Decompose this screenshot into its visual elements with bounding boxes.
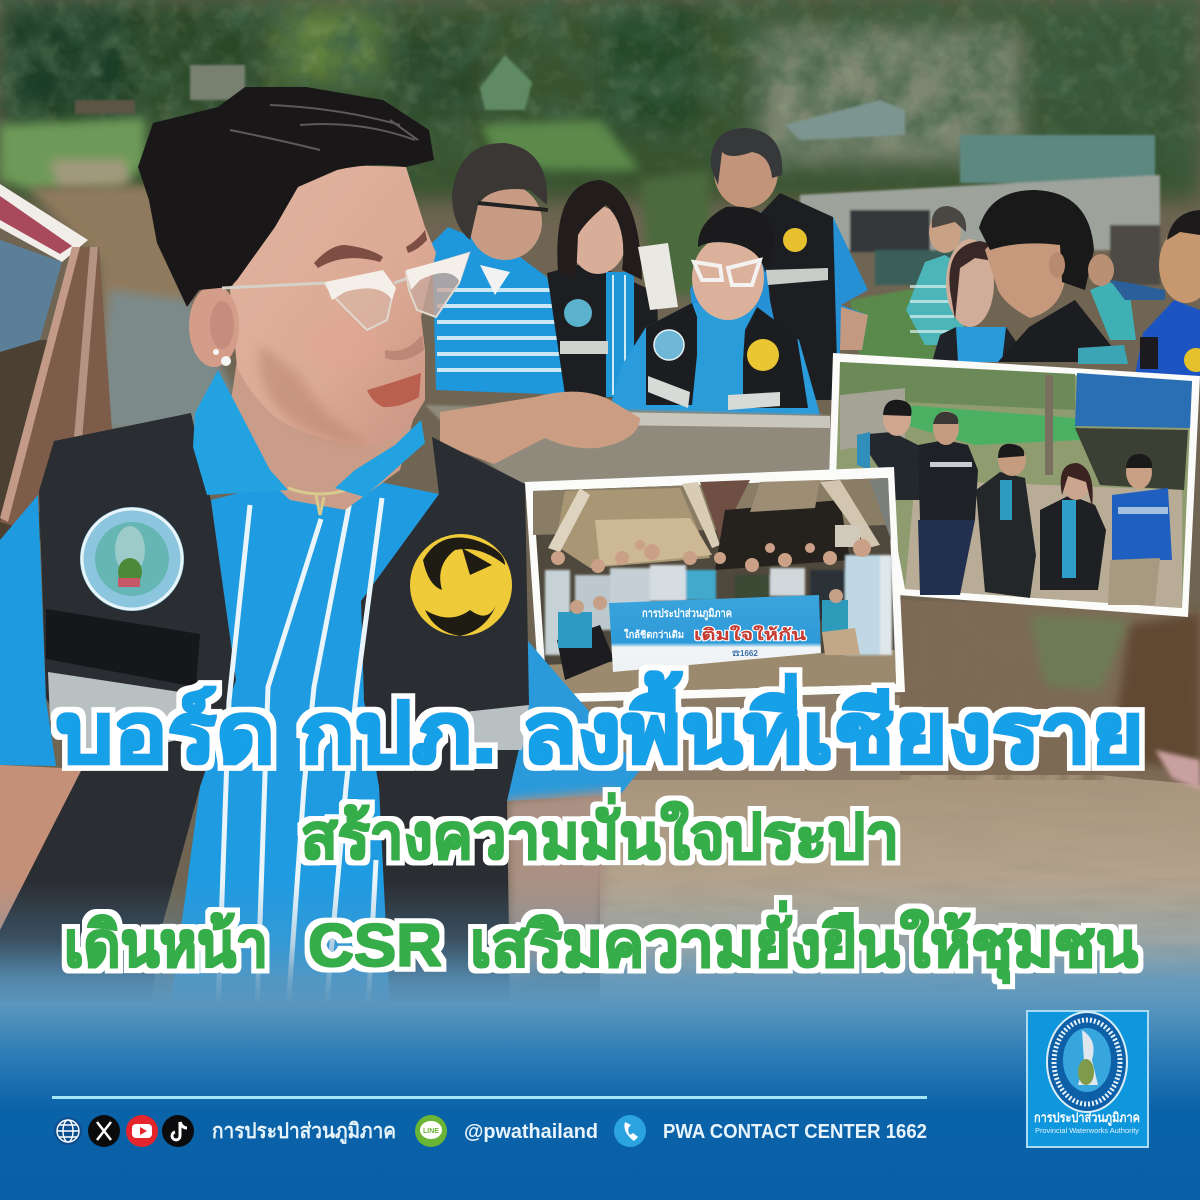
LINE handle: @pwathailand	[464, 1121, 598, 1143]
person 4	[1040, 463, 1106, 590]
official: man with short hair	[979, 190, 1128, 364]
shirt stripes	[218, 498, 382, 1010]
official: main woman in vest	[612, 207, 820, 415]
icon: X	[88, 1115, 120, 1147]
background group of officials, centre	[425, 128, 868, 520]
official: man in striped polo	[906, 206, 966, 345]
official: tall man behind	[690, 128, 868, 400]
photo scene	[836, 362, 1192, 608]
river and bank right	[600, 770, 1200, 1030]
reflective band right	[464, 705, 529, 750]
person 1	[857, 400, 922, 500]
logo seal	[1047, 1012, 1127, 1112]
banner: การประปาส่วนภูมิภาค	[642, 607, 732, 621]
headline line 3: เดินหน้า	[64, 911, 268, 980]
icon: globe	[54, 1117, 82, 1145]
organisation name: การประปาส่วนภูมิภาค	[212, 1120, 396, 1145]
yellow emblem on vest	[410, 534, 512, 636]
foliage texture	[0, 0, 1200, 166]
background group of officials, right	[906, 190, 1200, 380]
official: man in striped shirt	[432, 143, 570, 395]
hillside houses	[75, 55, 1160, 360]
main subject: woman in glasses and black PWA vest	[0, 87, 640, 1010]
eroded bank	[895, 600, 1200, 785]
footer contact row	[54, 1115, 927, 1147]
official: man at right in teal polo	[1088, 254, 1136, 340]
black vest	[0, 413, 529, 1010]
lips	[367, 373, 421, 407]
grassy riverbank	[0, 118, 710, 300]
contact centre: PWA CONTACT CENTER 1662	[663, 1121, 927, 1143]
icon: TikTok	[162, 1115, 194, 1147]
white photo frame	[829, 353, 1200, 617]
eyebrow	[314, 230, 427, 268]
official: woman in black vest	[547, 180, 660, 400]
left house with red roof	[0, 184, 88, 352]
photo: officials holding water glasses	[829, 353, 1200, 617]
icon: YouTube	[126, 1115, 158, 1147]
photo: group with banner	[525, 467, 905, 703]
headline line 3: เสริมความยั่งยืนให้ชุมชน	[470, 901, 1138, 983]
person 3	[976, 444, 1036, 598]
forest backdrop	[0, 0, 1200, 200]
rusty bridge	[0, 247, 112, 530]
ground	[905, 480, 1182, 608]
official: woman with glasses	[932, 239, 1030, 362]
necklace	[288, 488, 352, 515]
ground	[543, 650, 896, 694]
seated people	[557, 589, 860, 680]
short spiky black hair	[138, 87, 434, 307]
headline line 3	[64, 901, 1138, 983]
banner	[609, 595, 821, 672]
icon: phone	[614, 1115, 646, 1147]
right arm skin	[507, 790, 615, 985]
blue canopy	[1075, 373, 1192, 428]
nose shade	[385, 335, 424, 360]
ear	[189, 285, 239, 367]
banner: เติมใจให้กัน	[694, 625, 806, 644]
blue gradient fade at bottom	[0, 880, 1200, 1200]
velcro strip	[46, 609, 200, 687]
neck	[225, 360, 413, 510]
banner: ☎1662	[732, 649, 758, 658]
reflective band left	[48, 672, 196, 765]
stainless filter tray	[425, 405, 835, 520]
polo collar	[193, 370, 288, 495]
person 5 in blue jacket	[1108, 454, 1172, 605]
earrings	[213, 349, 231, 366]
footer divider	[52, 1096, 927, 1099]
banner: ใกล้ชิดกว่าเดิม	[624, 628, 684, 641]
white photo frame	[525, 467, 905, 703]
hair highlights	[230, 105, 418, 150]
blue canopy behind	[1110, 280, 1165, 300]
water ripple texture	[600, 770, 1200, 990]
left arm skin	[0, 765, 82, 930]
title	[56, 671, 1144, 983]
photo scene	[533, 478, 896, 694]
cheek shading	[259, 345, 370, 445]
person 2	[918, 411, 978, 595]
striped blue shirt	[170, 480, 439, 1010]
PWA seal badge on vest	[80, 507, 184, 611]
PWA logo box	[1027, 1011, 1148, 1147]
headline line 3: CSR	[308, 912, 442, 979]
white cat-eye glasses	[222, 253, 469, 330]
headline line 2: สร้างความมั่นใจประปา	[301, 793, 899, 872]
icon: LINE: LINE	[423, 1128, 439, 1135]
back row of people	[545, 555, 892, 655]
PWA logo box: Provincial Waterworks Authority	[1035, 1128, 1140, 1135]
official: man in blue jacket	[1135, 210, 1200, 380]
hand over tray	[440, 392, 640, 464]
river left	[28, 185, 232, 430]
right blue sleeve	[507, 640, 640, 801]
logo text: การประปาส่วนภูมิภาค	[1034, 1110, 1140, 1126]
face	[230, 165, 436, 447]
headline line 1: บอร์ด กปภ. ลงพื้นที่เชียงราย	[56, 671, 1144, 780]
left blue sleeve	[0, 495, 56, 766]
icon: LINE	[415, 1115, 447, 1147]
paper sheet	[638, 243, 678, 310]
